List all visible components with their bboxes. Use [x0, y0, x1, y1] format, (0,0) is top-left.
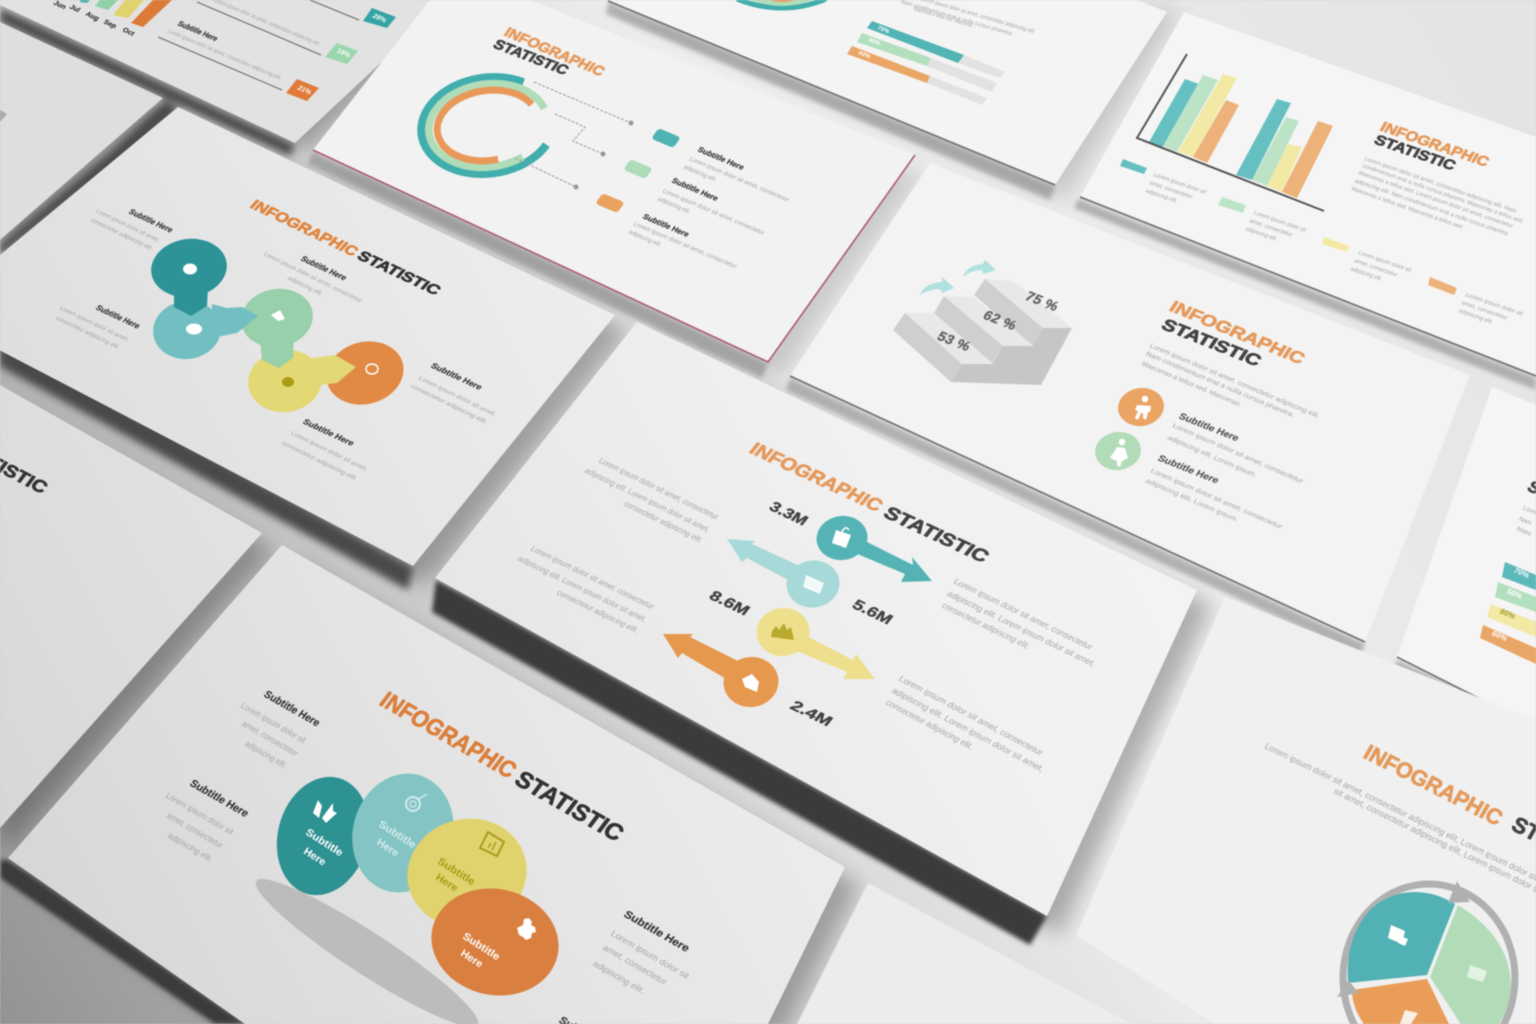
right text blocks: consectetur adipiscing elit. [884, 698, 976, 751]
legend text: amet, consectetur [1248, 219, 1294, 238]
icon: house [742, 674, 759, 692]
legend text: adipiscing elit. [656, 196, 692, 215]
body text: Nam condimentum erat a nulla cursus pharetra. [899, 0, 1015, 38]
slide: far right progress [1397, 387, 1536, 727]
body text: Lorem ipsum dolor sit amet, consectetur adipiscing elit. Nam [1363, 157, 1517, 215]
subtitle blocks: adipiscing elit. [243, 739, 290, 770]
subtitle blocks: adipiscing elit. [591, 959, 647, 996]
legend text: adipiscing elit. [627, 229, 663, 248]
body text: Maecenas a tellus sed. Maecenas a tellus sed. [1350, 187, 1465, 231]
left text blocks: adipiscing elit. Lorem ipsum dolor sit amet, [516, 554, 649, 624]
progress bars [1480, 562, 1536, 664]
body text: adipiscing elit. Nam condimentum erat a nulla cursus pharetra. [1353, 179, 1510, 238]
egg: teal: Here [301, 845, 328, 868]
month labels: Sep [102, 19, 118, 30]
legend text [1144, 173, 1524, 326]
subtitle blocks: Lorem ipsum dolor sit [239, 701, 309, 745]
subtitle blocks: consectetur adipiscing elit. [54, 315, 121, 351]
subtitle blocks: adipiscing elit. [166, 831, 215, 864]
egg: orange: Here [458, 947, 485, 970]
subtitle blocks: Lorem ipsum dolor sit amet, consectetur [1149, 468, 1284, 531]
subtitle blocks: Lorem ipsum dolor sit [164, 791, 236, 837]
stairs: 53 % [934, 328, 974, 354]
subtitle blocks: amet, consectetur [240, 719, 300, 758]
title: INFOGRAPHIC [1377, 120, 1492, 170]
icon: target [406, 794, 427, 811]
slide: ring statistic top center [313, 0, 915, 362]
badge 28%: 28% [371, 13, 388, 24]
slide: center arrows statistic [435, 322, 1197, 916]
left text blocks [516, 456, 721, 635]
stairs: 62 % [980, 307, 1020, 333]
body text [1515, 505, 1536, 538]
arrow: light teal 5.6M [727, 539, 843, 611]
month labels: Jul [68, 4, 81, 14]
icon: calculator lock [832, 528, 851, 548]
body text: Lorem ipsum dolor sit amet, consectetur adipiscing elit. [1148, 343, 1321, 420]
slide: top left list [0, 0, 448, 143]
month labels: Aug [84, 11, 100, 22]
circle chain chart [147, 234, 411, 417]
arrow: yellow 8.6M [753, 605, 875, 679]
subtitle blocks: consectetur adipiscing elit. [89, 217, 155, 252]
subtitle blocks [164, 689, 692, 1024]
subtitle blocks: Lorem ipsum dolor sit amet, [417, 375, 498, 418]
title [745, 439, 993, 567]
legend text: Lorem ipsum dolor sit amet, consectetur [632, 221, 739, 270]
subtitle blocks: Lorem ipsum dolor sit amet, [94, 208, 161, 244]
icon: man [1116, 385, 1166, 429]
egg: teal: Subtitle [303, 826, 345, 859]
legend text: adipiscing elit. [1144, 189, 1178, 205]
values: 8.6M [706, 588, 753, 619]
subtitle blocks: Lorem ipsum dolor sit [609, 929, 692, 981]
legend text: adipiscing elit. [1244, 227, 1278, 243]
subtitle blocks: Lorem ipsum dolor sit amet, [289, 430, 369, 473]
slide: blank bottom center [797, 883, 1132, 1024]
title: STATISTIC [1371, 133, 1459, 174]
legend text: amet, consectetur [1148, 181, 1194, 200]
slide: stairs statistic [790, 163, 1470, 642]
subtitle blocks [54, 207, 498, 482]
legend text: Lorem ipsum dolor sit [1252, 211, 1307, 234]
dashed leaders [515, 82, 633, 189]
progress bars [847, 21, 1005, 105]
slide: pie statistic bottom right [1076, 597, 1536, 1024]
stairs: 75 % [1022, 288, 1062, 314]
values: 3.3M [766, 499, 811, 529]
egg: yellow [395, 805, 539, 941]
values [706, 499, 896, 730]
title: INFOGRAPHIC [1166, 298, 1309, 368]
title [374, 687, 629, 847]
title: STATISTIC [353, 248, 444, 298]
subtitle blocks: Subtitle Here [187, 778, 251, 820]
subtitle blocks: adipiscing elit. Lorem ipsum. [1166, 435, 1258, 479]
left text blocks: Lorem ipsum dolor sit amet, consectetur [597, 456, 721, 521]
legend text: Lorem ipsum dolor sit [1152, 173, 1207, 196]
subtitle blocks: Subtitle Here [621, 909, 692, 955]
subtitle blocks: Subtitle Here [1176, 411, 1241, 444]
month labels: Jun [52, 0, 67, 11]
egg: yellow: Here [433, 871, 460, 894]
title [246, 197, 444, 298]
badge 28% [363, 8, 396, 28]
badge 21% [286, 79, 319, 101]
legend text: Lorem ipsum dolor sit [1357, 251, 1412, 274]
left text blocks: Lorem ipsum dolor sit amet, consectetur [529, 544, 657, 611]
progress bars: 70% [1512, 566, 1531, 580]
title: STATISTIC [1158, 316, 1265, 370]
ring chart [415, 70, 552, 182]
grey floor ellipse [245, 863, 489, 1024]
body text: condimentum erat a nulla cursus pharetra. Maecenas a tellus sed. [1361, 164, 1525, 225]
subtitle blocks: Lorem ipsum dolor sit amet, [58, 305, 131, 343]
icon: chart board [480, 832, 504, 856]
slide pink edge [313, 150, 915, 362]
progress bars: 60% [1490, 629, 1509, 643]
legend text [627, 145, 791, 270]
icon: briefcase [1388, 925, 1408, 946]
legend swatches [1120, 159, 1457, 295]
legend text: Lorem ipsum dolor sit [1464, 293, 1524, 317]
egg: light teal: Here [374, 836, 401, 859]
icon: floppy [803, 575, 824, 594]
slide: circle chain left [0, 107, 615, 566]
icon: factory chart [771, 623, 794, 640]
monthly bars [80, 0, 172, 27]
title: STATISTIC [879, 503, 993, 567]
subtitle blocks: amet, consectetur [165, 811, 225, 850]
subtitle blocks: Lorem ipsum dolor sit amet, consectetur [1171, 423, 1305, 485]
list rules and text [158, 0, 359, 90]
left text blocks: consectetur adipiscing elit. [555, 588, 641, 635]
values: 2.4M [787, 698, 836, 730]
values: 5.6M [849, 597, 896, 628]
subtitle blocks: Lorem ipsum dolor sit amet, consectetur [262, 251, 364, 304]
bar chart [1137, 54, 1333, 211]
egg: orange: Subtitle [460, 930, 502, 963]
badge 19% [325, 43, 358, 64]
subtitle blocks: amet, consectetur [601, 943, 669, 987]
arrow: orange 2.4M [663, 634, 782, 711]
subtitle blocks: Subtitle Here [429, 361, 485, 392]
body text: Nam condimentum erat a nulla cursus pharetra. [1144, 351, 1296, 419]
body text: Nam [1517, 516, 1533, 527]
title: INFOGRAPHIC [246, 197, 362, 260]
month labels: Oct [121, 27, 136, 38]
subtitle blocks [1144, 411, 1305, 531]
egg: light teal: Subtitle [376, 818, 418, 851]
icon: up down arrows [313, 800, 337, 823]
icon: calculator [1400, 1010, 1418, 1024]
legend chips [595, 128, 681, 213]
slide: overlapping eggs lower left [8, 545, 845, 1024]
slide: blank lower left with STIC [0, 385, 262, 828]
legend text: Subtitle Here [670, 176, 721, 203]
body text: Maec [1515, 526, 1534, 538]
egg: light teal [339, 762, 467, 904]
legend text: Subtitle Here [641, 212, 692, 239]
body text: Maecenas a tellus sed. Maecenas. [1140, 361, 1243, 408]
slide: bar chart top right [1080, 12, 1536, 376]
right text blocks: adipiscing elit. Lorem ipsum dolor sit amet, [890, 686, 1046, 773]
legend text: adipiscing elit. [1457, 309, 1494, 326]
progress bars: 60% [857, 51, 872, 60]
icon: money case [1467, 965, 1487, 982]
title: STATISTIC [509, 766, 629, 847]
subtitle blocks: Subtitle Here [299, 254, 350, 282]
subtitle blocks: adipiscing elit. [286, 275, 325, 297]
title: INFOGRAPHIC [745, 439, 887, 516]
subtitle blocks: Subtitle Here [127, 207, 176, 234]
chain icons [183, 264, 378, 387]
arrow: teal 3.3M [814, 513, 932, 582]
subtitle blocks: Subtitle Here [94, 303, 143, 330]
left text blocks: adipiscing elit. Lorem ipsum dolor sit amet, [583, 466, 713, 534]
pie chart [1337, 881, 1515, 1024]
month labels [52, 0, 136, 38]
subtitle blocks: adipiscing elit. Lorem ipsum. [1144, 478, 1240, 524]
progress bars: 80% [1498, 607, 1517, 621]
subtitle blocks: Subtitle Here [301, 417, 357, 448]
legend text: Lorem ipsum dolor sit amet, consectetur [688, 156, 791, 204]
subtitle blocks: Subtitle Here [1155, 453, 1221, 486]
title: INFOGRAPHIC [374, 687, 522, 784]
arrows [920, 260, 996, 295]
list rules and text: Lorem ipsum dolor sit amet, consectetur adipiscing elit. [166, 29, 283, 82]
title [1158, 298, 1309, 370]
subtitle blocks: consectetur adipiscing elit. [280, 440, 359, 482]
left text blocks: consectetur adipiscing elit. [622, 499, 706, 544]
legend text: amet, consectetur [1353, 259, 1399, 278]
subtitle blocks: consectetur adipiscing elit. [409, 383, 489, 426]
stairs [893, 279, 1072, 385]
legend text: adipiscing elit. [1349, 267, 1383, 283]
title: INFOGRAPHIC [501, 25, 608, 80]
body text: Maecenas a tellus sed. Maecenas. [912, 7, 975, 29]
slide: left blank [0, 22, 163, 240]
slide: progress bars top center [608, 0, 1167, 185]
progress bars: 70% [876, 26, 891, 35]
progress bars: 50% [1505, 587, 1524, 601]
legend text: adipiscing elit. [682, 164, 718, 183]
title: STATISTIC [490, 37, 572, 79]
legend text: Lorem ipsum dolor sit amet, consectetur [661, 188, 767, 237]
legend text: Subtitle Here [696, 145, 747, 172]
egg: orange [421, 877, 569, 1007]
right text blocks [884, 577, 1098, 773]
right text blocks: Lorem ipsum dolor sit amet, consectetur [952, 577, 1095, 651]
cropped ring [737, 0, 826, 8]
egg: yellow: Subtitle [435, 855, 477, 888]
icon: woman [1093, 429, 1143, 473]
badge 21%: 21% [296, 85, 313, 96]
body text: Maecenas a tellus sed. Lorem ipsum dolor sit amet, consectetur [1357, 171, 1514, 230]
title: INFOGRAPHIC [1360, 740, 1507, 831]
legend text: amet, consectetur [1460, 301, 1508, 321]
right text blocks: adipiscing elit. Lorem ipsum dolor sit amet, [945, 589, 1098, 668]
progress bars: 60% [867, 38, 882, 47]
icon: puzzle [517, 918, 536, 940]
egg: teal [264, 766, 382, 906]
right text blocks: consectetur adipiscing elit. [940, 601, 1033, 651]
list rules and text: Subtitle Here [176, 19, 220, 43]
subtitle blocks: Subtitle Here [261, 689, 322, 729]
badge 19%: 19% [335, 48, 352, 59]
right text blocks: Lorem ipsum dolor sit amet, consectetur [897, 674, 1045, 757]
